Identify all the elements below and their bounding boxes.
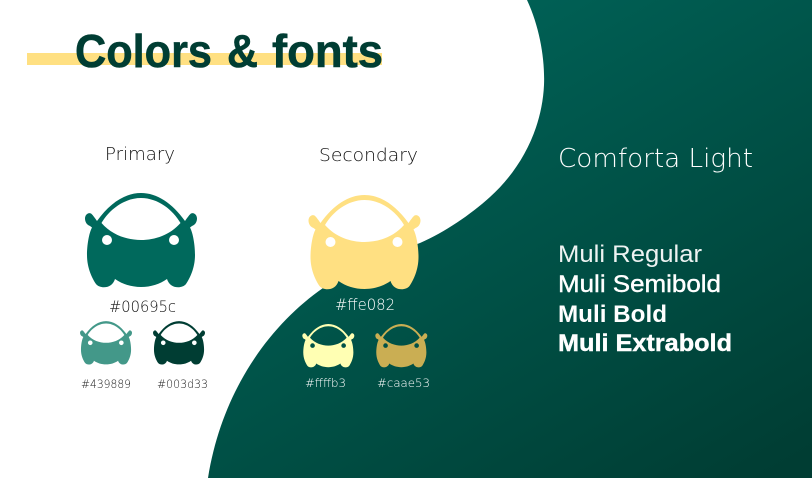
label: #439889: #439889 xyxy=(81,377,131,391)
background: curved green panel xyxy=(208,0,812,478)
title: fonts xyxy=(272,25,383,77)
font sample: Muli Regular: Muli Regular xyxy=(558,241,702,268)
title highlight bar xyxy=(27,53,382,65)
icon: primary car #00695c xyxy=(85,193,197,287)
heading: primary: Primary xyxy=(105,144,175,165)
label: #caae53: #caae53 xyxy=(377,376,430,390)
font sample: Muli Extrabold: Muli Extrabold xyxy=(558,330,732,357)
title: & xyxy=(227,25,258,77)
title xyxy=(75,25,383,77)
label: #ffe082: #ffe082 xyxy=(335,295,395,314)
label: #00695c: #00695c xyxy=(109,297,176,316)
label: #003d33: #003d33 xyxy=(157,377,208,391)
font sample: Muli Semibold: Muli Semibold xyxy=(558,271,721,298)
icon: shade car #003d33 xyxy=(153,321,205,365)
icon: tint car #439889 xyxy=(80,321,132,365)
font sample: Muli Bold: Muli Bold xyxy=(558,301,667,328)
icon: secondary car #ffe082 xyxy=(308,195,420,289)
label: #ffffb3: #ffffb3 xyxy=(305,376,346,390)
font sample: Comforta Light: Comforta Light xyxy=(558,144,753,174)
heading: secondary: Secondary xyxy=(319,145,418,166)
icon: tint car #ffffb3 xyxy=(302,324,354,367)
icon: shade car #caae53 xyxy=(375,324,427,367)
title: Colors xyxy=(75,25,212,77)
